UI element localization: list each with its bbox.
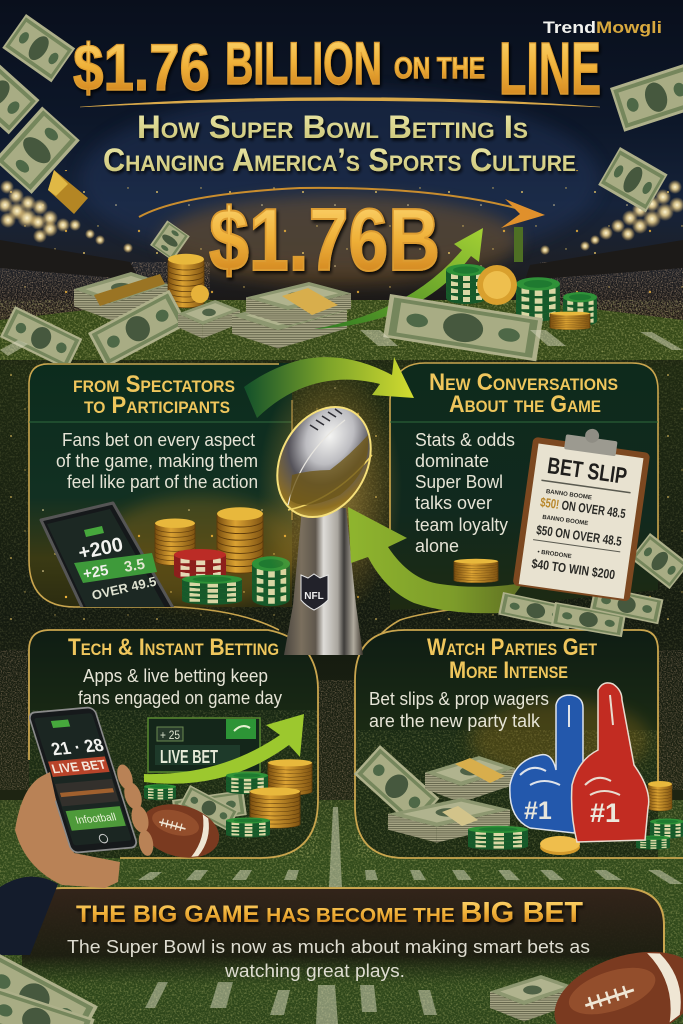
body text: fans engaged on game day — [78, 688, 282, 708]
body text: alone — [415, 536, 459, 556]
bottom left bills — [0, 950, 98, 1024]
heading: New Conversations — [429, 369, 618, 396]
body text — [56, 430, 258, 492]
slip lines: BANNO BOOME — [545, 489, 592, 501]
bills under bet slip — [498, 533, 683, 637]
slip lines: $50 ON OVER 48.5 — [535, 522, 623, 549]
hand — [15, 775, 120, 888]
phone: 21 · 28 — [49, 735, 106, 759]
NFL shield: NFL — [304, 591, 324, 602]
trophy pillar — [284, 508, 363, 655]
banner heading: THE BIG GAME HAS BECOME THE BIG BET — [76, 897, 583, 929]
slip lines: $40 TO WIN $200 — [531, 556, 616, 582]
slip lines — [529, 488, 627, 583]
title underline — [80, 98, 600, 107]
title — [73, 27, 601, 110]
body text: talks over — [415, 493, 492, 513]
live bet board: LIVE BET — [160, 747, 218, 767]
panel: new conversations about the game — [370, 363, 658, 650]
body text: are the new party talk — [369, 711, 541, 731]
football — [135, 796, 225, 866]
subtitle: How Super Bowl Betting Is — [137, 109, 528, 145]
bottom right football — [543, 935, 683, 1024]
body text — [78, 666, 282, 708]
title: ON THE — [394, 52, 485, 85]
body text: Apps & live betting keep — [83, 666, 268, 686]
goal post — [514, 227, 523, 262]
rising green arrow — [314, 228, 483, 329]
chips, coins, bills — [144, 759, 312, 838]
body text: dominate — [415, 451, 489, 471]
live bet board — [148, 718, 260, 772]
slip lines: • BRODONE — [537, 549, 572, 560]
banner body — [67, 937, 590, 981]
heading — [427, 634, 598, 684]
green arrow — [144, 714, 304, 784]
bet slip on clipboard — [513, 421, 652, 602]
body text — [415, 430, 515, 556]
phone with odds: +200 — [76, 534, 125, 565]
title: BILLION — [225, 30, 382, 97]
heading — [429, 369, 618, 418]
blue foam finger — [510, 695, 584, 833]
brand logo: Trend Mowgli — [543, 18, 662, 37]
body text: Bet slips & prop wagers — [369, 689, 549, 709]
body text: Super Bowl — [415, 472, 503, 492]
hand holding phone — [0, 707, 155, 955]
body text: team loyalty — [415, 515, 508, 535]
body text — [369, 689, 549, 731]
closing banner — [22, 888, 664, 985]
stadium lights right — [540, 180, 683, 255]
cash stacks — [354, 745, 515, 843]
subtitle — [103, 109, 576, 178]
trophy football — [259, 391, 389, 533]
title: LINE — [499, 27, 601, 110]
chips and coin — [468, 781, 683, 855]
body text: Fans bet on every aspect — [62, 430, 255, 450]
phone — [28, 707, 138, 853]
slip lines: $50! ON OVER 48.5 — [539, 494, 627, 521]
green arrow: conversations back to trophy — [348, 507, 523, 613]
blue foam finger: #1 — [524, 797, 552, 825]
panel: watch parties get more intense — [354, 630, 683, 858]
banner body: The Super Bowl is now as much about making smart bets as — [67, 937, 590, 957]
phone with odds: 3.5 — [123, 556, 146, 576]
phone with odds: +25 — [82, 562, 110, 583]
sleeve — [0, 877, 58, 955]
heading: to Participants — [84, 392, 230, 419]
title: $1.76 — [73, 30, 210, 104]
green arrow: participants to conversations — [244, 357, 414, 418]
bottom right cash — [490, 975, 575, 1022]
heading — [73, 371, 235, 419]
money pile: centre — [232, 282, 351, 348]
field yard markers — [0, 330, 683, 1024]
banner body: watching great plays. — [224, 961, 405, 981]
panel: from spectators to participants — [29, 363, 300, 630]
heading: Watch Parties Get — [427, 634, 598, 661]
body text: feel like part of the action — [67, 472, 258, 492]
subtitle: Changing America’s Sports Culture — [103, 142, 576, 178]
slip heading: BET SLIP — [546, 452, 629, 489]
panel: tech and instant betting — [29, 630, 318, 866]
body text: of the game, making them — [56, 451, 258, 471]
phone with odds: OVER 49.5 — [90, 574, 158, 603]
flying bills and gold cone — [0, 14, 683, 261]
heading: More Intense — [449, 657, 568, 684]
heading: from Spectators — [73, 371, 235, 398]
big figure: $1.76B — [209, 190, 440, 289]
gold coin stack — [454, 559, 498, 583]
curved progress arrow — [139, 188, 545, 228]
live bet board: + 25 — [160, 728, 180, 742]
phone with odds — [40, 502, 174, 607]
red foam finger — [572, 683, 649, 842]
chips, coins and large banknote — [383, 264, 597, 361]
trophy glow — [258, 360, 402, 620]
chip and coin stacks — [155, 507, 290, 606]
NFL shield — [301, 574, 328, 610]
body text: Stats & odds — [415, 430, 515, 450]
fingers — [40, 762, 155, 857]
phone: Infootball — [74, 812, 118, 827]
money pile: left — [0, 254, 240, 370]
heading: Tech & Instant Betting — [68, 634, 279, 661]
phone: LIVE BET — [50, 757, 108, 776]
heading: About the Game — [449, 391, 601, 418]
slip lines: BANNO BOOME — [542, 515, 589, 527]
stadium lights left — [0, 180, 133, 253]
trophy — [259, 391, 389, 655]
red foam finger: #1 — [590, 798, 620, 828]
